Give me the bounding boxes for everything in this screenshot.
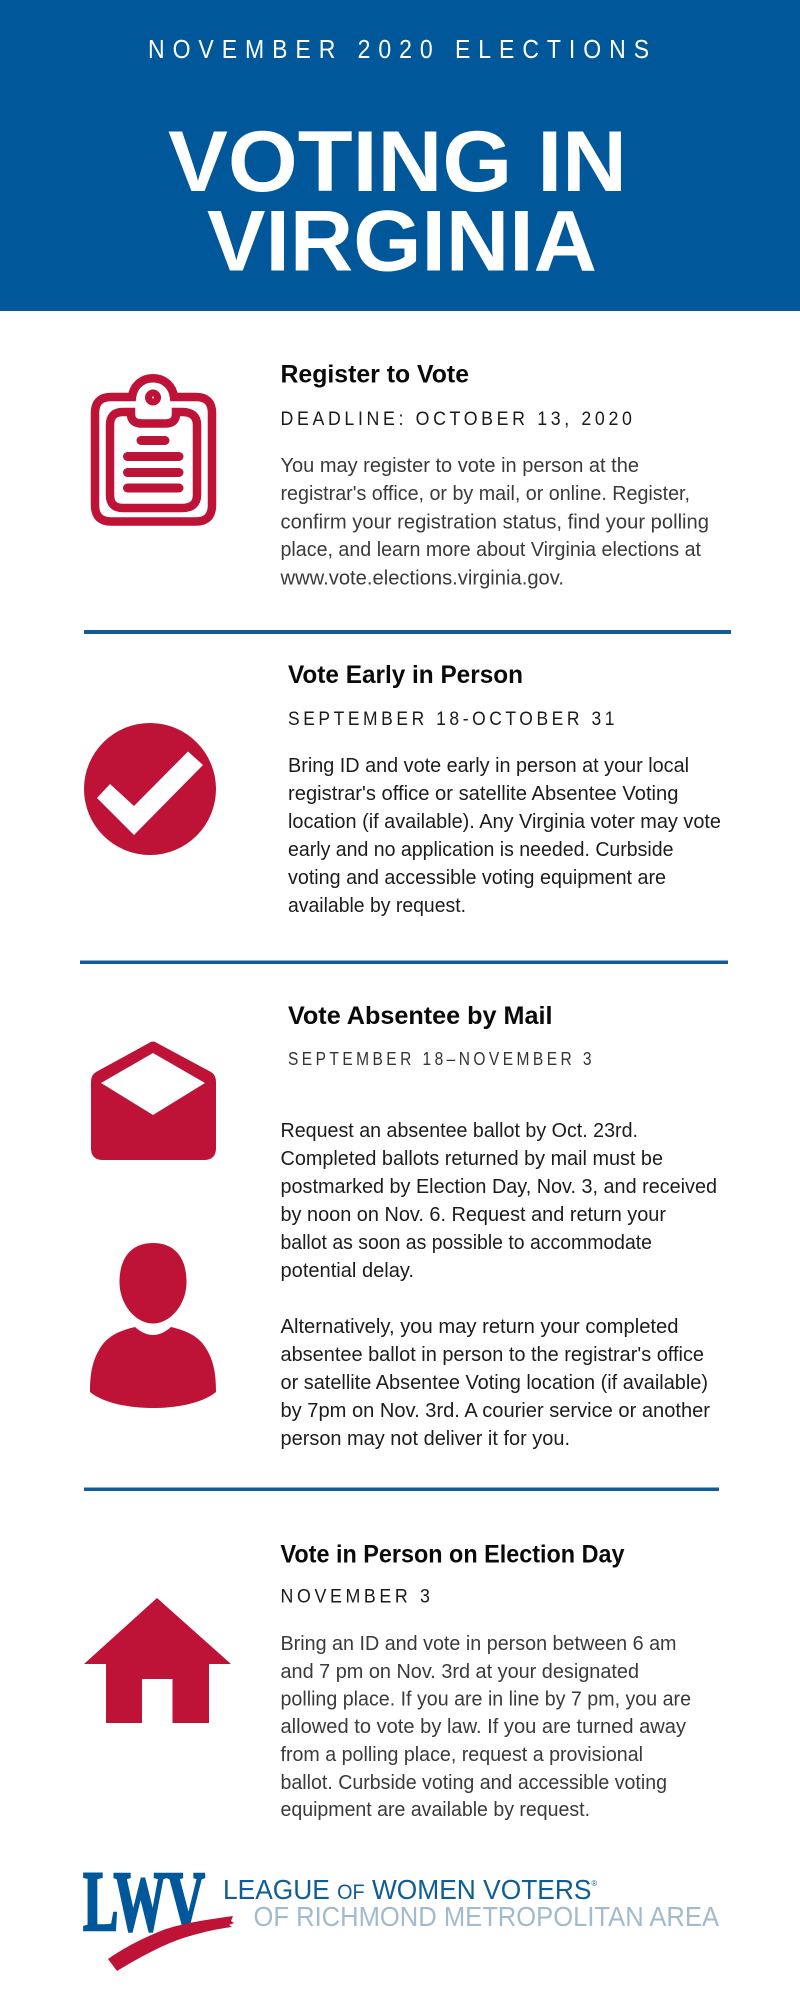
body text: polling place. If you are in line by 7 pm, you are (280, 1688, 691, 1710)
heading: Vote in Person on Election Day (280, 1540, 625, 1568)
body text: You may register to vote in person at the (280, 454, 639, 477)
icon: envelope (91, 1042, 216, 1160)
icon: house (84, 1598, 231, 1723)
organisation name: ® (591, 1879, 597, 1888)
body text: potential delay. (280, 1259, 414, 1282)
title (168, 114, 627, 290)
body text: person may not deliver it for you. (280, 1427, 570, 1450)
title: VIRGINIA (207, 194, 597, 290)
body text (280, 454, 709, 590)
body text: location (if available). Any Virginia voter may vote (288, 810, 721, 833)
panel: register to vote (95, 360, 709, 590)
body text: absentee ballot in person to the registrar's office (280, 1343, 704, 1366)
date: SEPTEMBER 18–NOVEMBER 3 (288, 1049, 595, 1069)
body text: by 7pm on Nov. 3rd. A courier service or another (280, 1399, 710, 1422)
body text: Bring ID and vote early in person at your local (288, 754, 689, 777)
body text: confirm your registration status, find your polling (280, 510, 709, 534)
organisation name: LEAGUE OF WOMEN VOTERS (223, 1874, 606, 1905)
date: SEPTEMBER 18-OCTOBER 31 (288, 708, 618, 730)
logo: League of Women Voters of Richmond Metropolitan Area (83, 1853, 719, 1971)
body text: postmarked by Election Day, Nov. 3, and received (280, 1175, 717, 1198)
date: NOVEMBER 3 (280, 1586, 434, 1608)
body text: registrar's office, or by mail, or online. Register, (280, 482, 690, 505)
heading: Vote Absentee by Mail (288, 1002, 552, 1030)
icon: check mark (84, 723, 216, 855)
body text: early and no application is needed. Curbside (288, 838, 674, 861)
icon: person (90, 1243, 216, 1408)
body text: voting and accessible voting equipment are (288, 866, 666, 889)
body text: www.vote.elections.virginia.gov. (280, 566, 564, 590)
panel: vote in person on election day (84, 1540, 691, 1821)
panel: vote absentee by mail (90, 1002, 717, 1450)
red brush stroke (108, 1916, 234, 1971)
body text: Alternatively, you may return your completed (280, 1315, 678, 1338)
body text (280, 1119, 717, 1450)
body text: equipment are available by request. (280, 1798, 590, 1821)
body text: or satellite Absentee Voting location (if available) (280, 1371, 708, 1394)
body text: allowed to vote by law. If you are turned away (280, 1715, 687, 1738)
body text: from a polling place, request a provisional (280, 1743, 643, 1766)
body text: ballot. Curbside voting and accessible voting (280, 1771, 667, 1794)
body text: Completed ballots returned by mail must be (280, 1147, 663, 1170)
body text: available by request. (288, 894, 466, 917)
heading: Register to Vote (280, 360, 469, 388)
body text: and 7 pm on Nov. 3rd at your designated (280, 1660, 639, 1683)
body text (280, 1632, 691, 1821)
icon: clipboard (95, 378, 212, 522)
eyebrow: November 2020 Elections: NOVEMBER 2020 ELECTIONS (148, 34, 657, 64)
title: VOTING IN (168, 114, 627, 210)
body text: ballot as soon as possible to accommodate (280, 1231, 652, 1254)
body text: Request an absentee ballot by Oct. 23rd. (280, 1119, 638, 1142)
chapter name: OF RICHMOND METROPOLITAN AREA (254, 1901, 719, 1932)
LWV monogram: LWV (83, 1853, 205, 1949)
date: DEADLINE: OCTOBER 13, 2020 (280, 408, 636, 430)
body text: place, and learn more about Virginia elections at (280, 538, 701, 561)
body text: registrar's office or satellite Absentee Voting (288, 782, 678, 805)
body text: Bring an ID and vote in person between 6 am (280, 1632, 676, 1655)
panel: vote early in person (84, 661, 721, 917)
header banner (0, 0, 800, 311)
body text: by noon on Nov. 6. Request and return your (280, 1203, 666, 1226)
heading: Vote Early in Person (288, 661, 523, 689)
body text (288, 754, 721, 917)
